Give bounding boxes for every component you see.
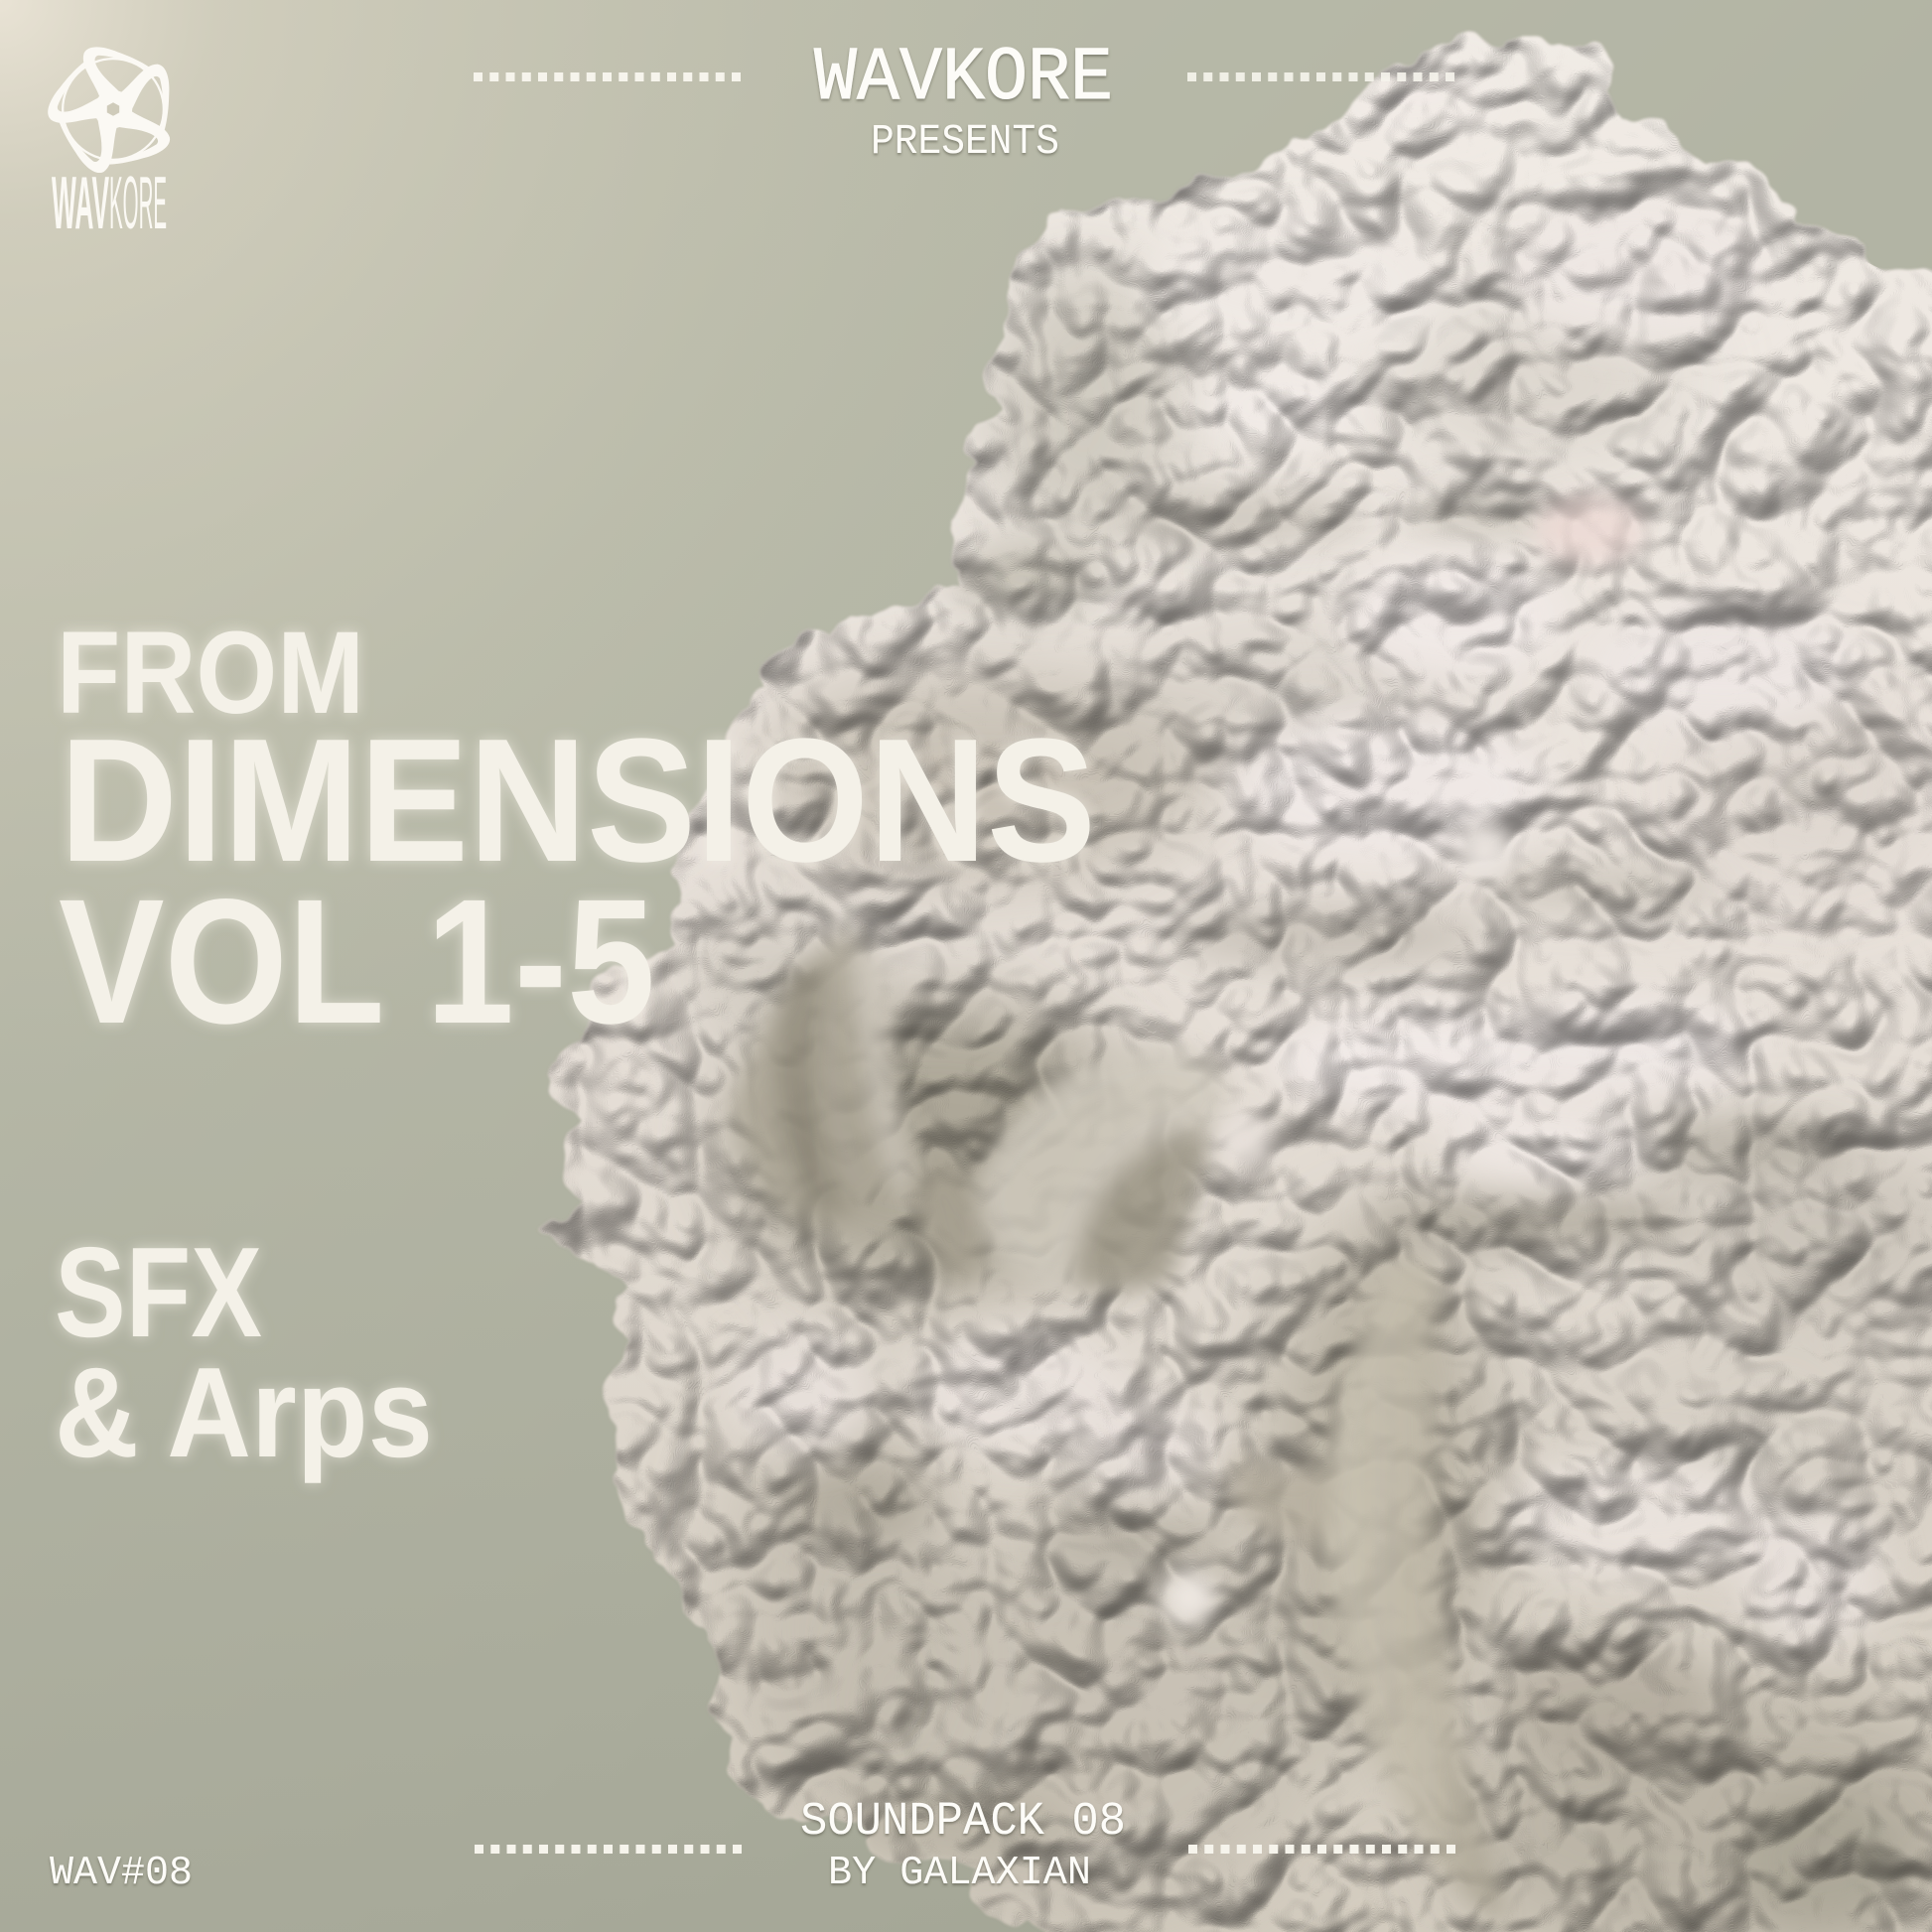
soundpack label: SOUNDPACK 08 <box>800 1796 1126 1849</box>
author label: BY GALAXIAN <box>828 1851 1091 1896</box>
cloud highlights <box>1162 495 1644 1625</box>
brand name: WAVKORE <box>814 36 1113 121</box>
cloud shading <box>516 0 1932 1932</box>
dotted rule bottom right <box>1188 1845 1455 1854</box>
dotted rule top left <box>474 72 741 81</box>
logo wordmark: WAV <box>52 161 109 244</box>
logo: WAVKORE mark <box>38 44 188 244</box>
title block <box>55 608 1096 1484</box>
fold: central column <box>1232 1262 1506 1922</box>
subtitle: & Arps: & Arps <box>55 1341 433 1484</box>
catalogue number: WAV#08 <box>50 1851 193 1896</box>
title: DIMENSIONS: DIMENSIONS <box>60 702 1096 898</box>
footer <box>50 1796 1126 1896</box>
header: WAVKORE presents <box>814 36 1113 166</box>
icon: five-arm spiral <box>38 44 188 188</box>
image: white ink cloud <box>516 0 1932 1932</box>
dotted rule top right <box>1187 72 1454 81</box>
subtitle: SFX: SFX <box>55 1221 262 1364</box>
title: VOL 1-5: VOL 1-5 <box>59 862 655 1060</box>
dotted rule bottom left <box>475 1845 742 1854</box>
cloud silhouette <box>548 40 1932 1932</box>
smooth folds over the texture <box>733 495 1644 1922</box>
title: FROM: FROM <box>57 608 364 739</box>
presents label: PRESENTS <box>871 117 1059 166</box>
fold: left swirl <box>733 930 918 1225</box>
cloud surface texture <box>516 0 1932 1932</box>
album cover: KORE <box>109 161 167 244</box>
fold: centre swirl <box>911 1047 1227 1291</box>
